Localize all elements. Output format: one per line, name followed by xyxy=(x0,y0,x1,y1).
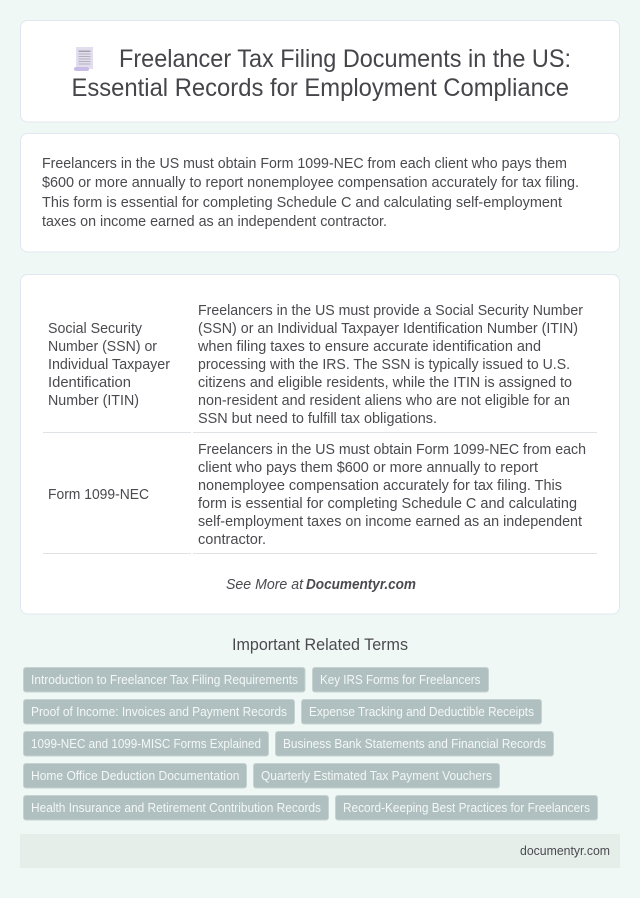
row label: SSN or ITIN: Individual Taxpayer xyxy=(48,357,170,373)
tag xyxy=(24,700,294,724)
row label: SSN or ITIN xyxy=(48,321,170,409)
tag: Home Office Deduction Documentation xyxy=(31,768,240,783)
see more link: Documentyr.com xyxy=(306,577,416,593)
row description: SSN or ITIN: when filing taxes to ensure accurate identification and xyxy=(197,339,541,355)
title xyxy=(72,45,571,102)
tag xyxy=(24,796,328,820)
row description: SSN or ITIN: (SSN) or an Individual Taxpayer Identification Number (ITIN) xyxy=(198,321,578,337)
panel: intro summary xyxy=(20,134,620,252)
row label: SSN or ITIN: Number (SSN) or xyxy=(48,339,157,355)
row label: SSN or ITIN: Social Security xyxy=(48,321,143,337)
intro paragraph: taxes on income earned as an independent contractor. xyxy=(42,214,387,230)
tag: Expense Tracking and Deductible Receipts xyxy=(309,704,534,719)
tag: Business Bank Statements and Financial Records xyxy=(283,736,546,751)
tag xyxy=(276,732,554,756)
related terms tags xyxy=(24,668,598,820)
footer: documentyr.com xyxy=(520,843,610,858)
see more link: See More at xyxy=(226,577,304,593)
table row: Form 1099-NEC xyxy=(48,442,586,548)
title: Freelancer Tax Filing Documents in the US: xyxy=(119,45,571,73)
tag xyxy=(24,732,268,756)
intro paragraph xyxy=(42,156,579,230)
tag: Proof of Income: Invoices and Payment Records xyxy=(31,704,287,719)
tag: Record-Keeping Best Practices for Freelancers xyxy=(343,800,590,815)
row description: SSN or ITIN xyxy=(197,303,583,427)
row description: Form 1099-NEC: client who pays them $600 or more annually to report xyxy=(198,460,538,476)
row label: Form 1099-NEC: Form 1099-NEC xyxy=(48,487,149,503)
tag: Quarterly Estimated Tax Payment Vouchers xyxy=(261,768,492,783)
row description: Form 1099-NEC xyxy=(198,442,586,548)
row description: SSN or ITIN: SSN but need to fulfill tax obligations. xyxy=(198,411,437,427)
row label: SSN or ITIN: Identification xyxy=(48,375,131,391)
tag: Health Insurance and Retirement Contribution Records xyxy=(31,800,321,815)
intro paragraph: Freelancers in the US must obtain Form 1099-NEC from each client who pays them xyxy=(42,156,567,172)
footer xyxy=(20,834,620,868)
tag xyxy=(302,700,542,724)
icon: purple tax receipt scroll xyxy=(74,47,93,71)
row label: SSN or ITIN: Number (ITIN) xyxy=(48,393,139,409)
tag xyxy=(336,796,598,820)
heading: important related terms: Important Related Terms xyxy=(232,636,408,654)
intro paragraph: $600 or more annually to report nonemployee compensation accurately for tax filing. xyxy=(42,175,579,191)
row description: SSN or ITIN: non-resident and resident aliens who are not eligible for an xyxy=(198,393,570,409)
row description: Form 1099-NEC: nonemployee compensation accurately for tax filing. This xyxy=(198,478,562,494)
see more link xyxy=(226,577,416,593)
title: Essential Records for Employment Compliance xyxy=(72,74,569,102)
row description: Form 1099-NEC: contractor. xyxy=(198,532,266,548)
tag: Key IRS Forms for Freelancers xyxy=(320,672,480,687)
row description: SSN or ITIN: processing with the IRS. The SSN is typically issued to U.S. xyxy=(198,357,570,373)
panel: documents table xyxy=(20,274,620,614)
tag: 1099-NEC and 1099-MISC Forms Explained xyxy=(31,736,261,751)
panel: title card xyxy=(20,20,620,122)
row description: Form 1099-NEC: self-employment taxes on income earned as an independent xyxy=(198,514,582,530)
intro paragraph: This form is essential for completing Schedule C and calculating self-employment xyxy=(42,195,562,211)
row description: SSN or ITIN: citizens and eligible residents, while the ITIN is assigned to xyxy=(198,375,572,391)
tag xyxy=(24,668,305,692)
tag: Introduction to Freelancer Tax Filing Requirements xyxy=(31,672,298,687)
row description: Form 1099-NEC: form is essential for completing Schedule C and calculating xyxy=(198,496,577,512)
row description: SSN or ITIN: Freelancers in the US must provide a Social Security Number xyxy=(198,303,583,319)
row description: Form 1099-NEC: Freelancers in the US must obtain Form 1099-NEC from each xyxy=(198,442,586,458)
tag xyxy=(312,668,488,692)
tag xyxy=(24,764,246,788)
table row: SSN or ITIN xyxy=(48,303,583,427)
tag xyxy=(254,764,500,788)
